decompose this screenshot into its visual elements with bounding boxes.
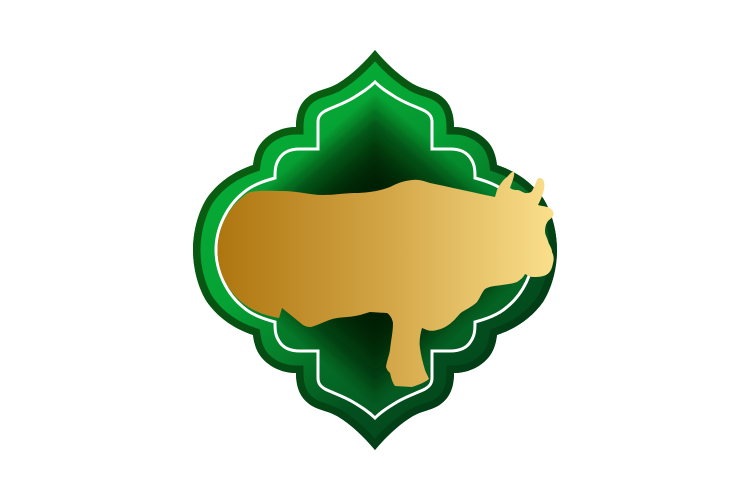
badge: white inline border — [216, 82, 534, 418]
badge logo illustration — [193, 50, 557, 450]
cow silhouette — [218, 172, 554, 387]
badge: inner shaded panel — [218, 96, 528, 416]
badge: outer frame — [193, 50, 557, 450]
